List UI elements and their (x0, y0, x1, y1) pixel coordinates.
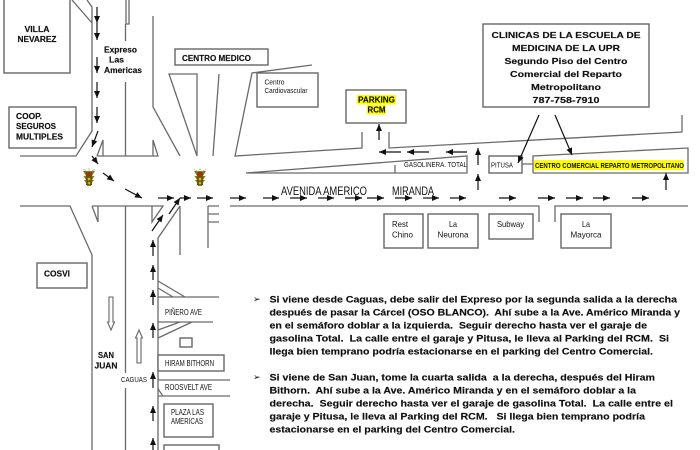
arrows: along Avenida Americo Miranda (158, 197, 649, 199)
building: Centro Cardiovascular: Cardiovascular (264, 86, 308, 95)
directions: from Caguas: Si viene desde Caguas, debe salir del Expreso por la segunda salida a la derecha (270, 294, 677, 304)
building: Parking RCM: PARKING (358, 96, 395, 104)
directions: from Caguas: en el semáforo doblar a la izquierda. Seguir derecho hasta ver el garaje de (270, 320, 647, 330)
building: Pitusa (489, 156, 522, 173)
icon: traffic light left (83, 168, 95, 186)
building: Coop. Seguros Multiples: MULTIPLES (16, 132, 64, 142)
building: Plaza Las Americas: PLAZA LAS (171, 408, 204, 417)
callout: clinic address (483, 24, 649, 107)
building: La Mayorca: Mayorca (570, 230, 602, 240)
building: Rest Chino: Chino (392, 230, 413, 240)
building: Centro Cardiovascular (257, 73, 318, 107)
directions: from Caguas: después de pasar la Cárcel (OSO BLANCO). Ahí sube a la Ave. Américo Miranda y (270, 308, 680, 318)
small building (180, 338, 192, 347)
directions: from San Juan: estacionarse en el parking del Centro Comercial. (270, 424, 515, 434)
directions: from Caguas: llega bien temprano podría estacionarse en el parking del Centro Comercial. (270, 346, 653, 356)
label: Expreso Las Americas (104, 46, 143, 75)
building: Cosvi (37, 263, 87, 288)
callout: clinic address: Metropolitano (531, 82, 601, 92)
building: Pitusa: PITUSA (491, 162, 513, 170)
label: Expreso Las Americas: Americas (104, 66, 143, 75)
directions: from Caguas: gasolina Total. La calle entre el garaje y Pitusa, le lleva al Parking del RCM. Si (270, 334, 669, 344)
arrows: from clinic callout (518, 115, 572, 163)
street name: Avenida Americo Miranda: AVENIDA AMERICO (281, 184, 367, 198)
building: Rest Chino: Rest (392, 219, 409, 229)
directions: from San Juan: Bithorn. Ahí sube a la Ave. Américo Miranda y en el semáforo doblar a la (270, 386, 636, 396)
arrow: hollow toward San Juan (108, 297, 114, 330)
label: Expreso Las Americas: Las (109, 56, 125, 64)
building: Villa Nevarez: VILLA (24, 25, 50, 34)
street: Piñero Ave: PIÑERO AVE (165, 308, 202, 317)
building: Plaza Las Americas: AMERICAS (171, 417, 203, 426)
building: Centro Cardiovascular: Centro (264, 78, 284, 86)
callout: clinic address: MEDICINA DE LA UPR (512, 43, 620, 53)
directions: from San Juan: derecha. Seguir derecho hasta ver el garaje de gasolina Total. La calle entre el (270, 398, 673, 408)
building: La Mayorca (561, 214, 611, 248)
arrows: route from Expreso to avenue (92, 7, 180, 231)
building: Coop. Seguros Multiples: COOP. (16, 112, 42, 121)
building: Centro Medico (175, 49, 268, 65)
street name: Avenida Americo Miranda: MIRANDA (392, 184, 434, 198)
label: San Juan: SAN (98, 351, 114, 360)
building: Subway (489, 214, 533, 239)
building: Coop. Seguros Multiples: SEGUROS (16, 122, 57, 131)
building: Cosvi: COSVI (44, 270, 70, 278)
arrows: to Parking RCM (379, 124, 666, 190)
building: Rest Chino (384, 214, 423, 248)
building: La Mayorca: La (582, 219, 590, 229)
building: La Neurona (428, 214, 478, 248)
building: Gasolinera Total: GASOLINERA. TOTAL (404, 160, 467, 169)
building: Villa Nevarez (4, 0, 70, 73)
label: Caguas: CAGUAS (121, 375, 147, 384)
building: Parking RCM: RCM (368, 106, 386, 114)
arrows: northbound from Caguas (152, 240, 154, 450)
building: Villa Nevarez: NEVAREZ (18, 35, 57, 44)
street: Roosvelt Ave: ROOSVELT AVE (165, 383, 212, 392)
building: Coop. Seguros Multiples (9, 107, 76, 148)
directions: from San Juan (253, 372, 673, 434)
building: Plaza Las Americas (164, 404, 213, 437)
callout: clinic address: 787-758-7910 (532, 95, 600, 105)
label: San Juan: JUAN (94, 362, 118, 370)
building: Subway: Subway (497, 219, 525, 229)
directions: from Caguas: ➢ (253, 295, 261, 305)
building: La Neurona: La (449, 219, 457, 229)
label: San Juan (94, 351, 118, 370)
building: La Neurona: Neurona (438, 230, 469, 240)
label: Expreso Las Americas: Expreso (104, 46, 137, 54)
building: lower block (164, 445, 219, 450)
building: Centro Medico: CENTRO MEDICO (182, 54, 251, 63)
icon: traffic light right (194, 168, 206, 186)
building: Parking RCM (346, 90, 406, 123)
directions: from San Juan: Si viene de San Juan, tome la cuarta salida a la derecha, después del Hiram (270, 372, 655, 382)
directions: from San Juan: garaje y Pitusa, le lleva al Parking del RCM. Si llega bien temprano podría (270, 412, 645, 422)
arrow: hollow toward Caguas (136, 330, 142, 363)
callout: clinic address: Comercial del Reparto (510, 69, 622, 79)
building: Hiram Bithorn (158, 355, 224, 371)
callout: clinic address: Segundo Piso del Centro (504, 56, 628, 66)
directions: from Caguas (253, 294, 680, 356)
directions: from San Juan: ➢ (253, 373, 261, 383)
building: Hiram Bithorn: HIRAM BITHORN (165, 359, 214, 368)
callout: clinic address: CLINICAS DE LA ESCUELA DE (492, 30, 641, 40)
